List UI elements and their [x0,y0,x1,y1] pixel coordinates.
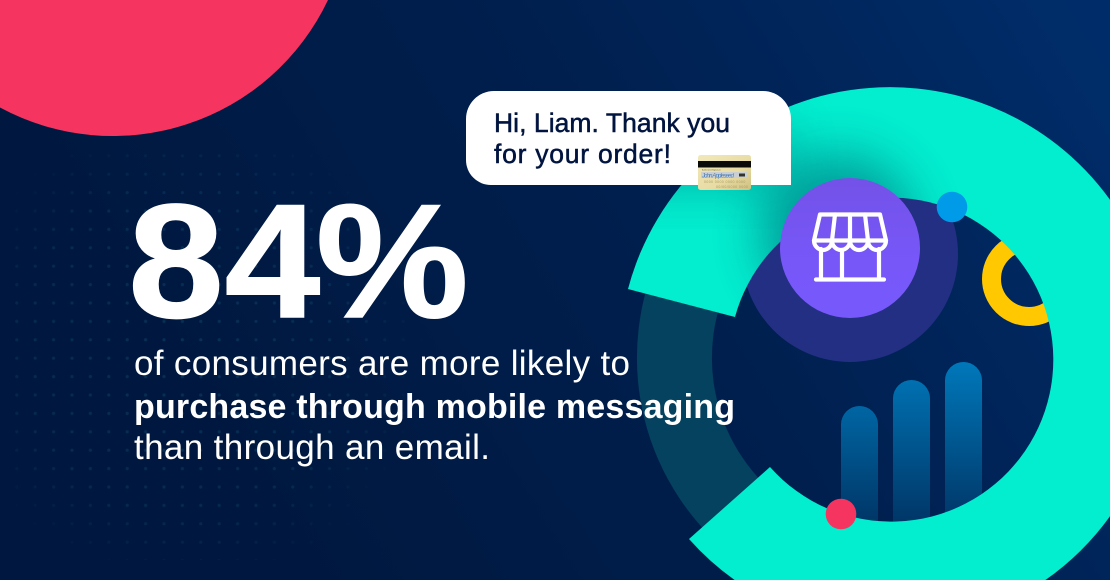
body copy [134,344,735,467]
icon: credit card: John Appleseed [701,174,735,180]
store icon badge [780,178,920,318]
yellow ring [992,242,1066,316]
icon: credit card: 0000 0000 0000 0000 [704,180,746,184]
soft shadow on teal ring [664,114,938,285]
icon: credit card [698,155,751,190]
icon: credit card: 00/00/0000 0000 [716,185,748,189]
headline stat: 84% [128,171,469,352]
teal ring [628,87,1110,580]
icon: credit card: Authorized Signature [702,168,722,172]
dark purple circle [747,198,958,362]
coral dot [826,499,856,529]
decorative coral circle [0,0,328,136]
icon: storefront [814,214,886,280]
bubble text: Hi, Liam. Thank you [494,108,730,138]
body copy: of consumers are more likely to [134,344,630,383]
body copy: purchase through mobile messaging [134,388,735,426]
blue dot [937,192,967,222]
bubble text: for your order! [494,139,671,169]
bar chart [841,362,982,522]
chat bubble [466,91,791,185]
dark teal ring [674,264,761,530]
body copy: than through an email. [134,428,490,467]
